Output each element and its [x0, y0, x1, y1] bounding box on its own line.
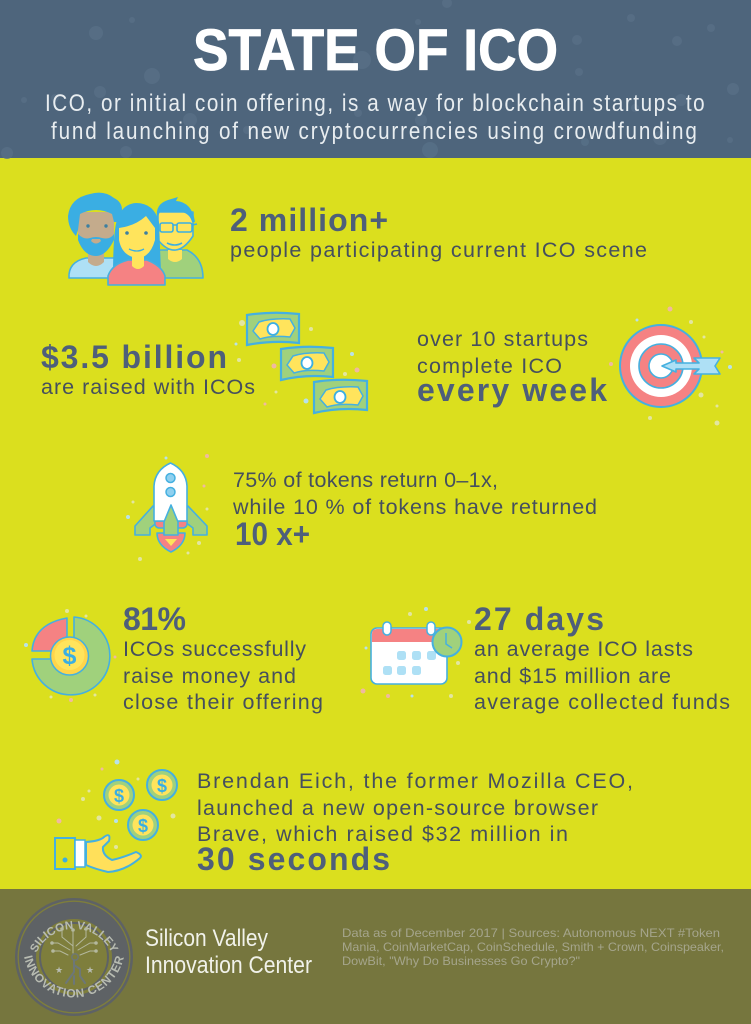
coin two: $ [157, 776, 167, 796]
stat: 30 seconds: 30 seconds [197, 841, 390, 877]
stat: 27 days: an average ICO lasts [474, 637, 693, 661]
stat: 30 seconds [197, 769, 633, 877]
stat: 10x+ [232, 468, 597, 552]
stat: $3.5 billion [41, 339, 255, 399]
man right [155, 197, 203, 278]
icon: hand with coins [55, 770, 177, 872]
organisation name [145, 925, 312, 979]
stat: every week: every week [417, 372, 607, 408]
decorative sparkle dots [24, 306, 732, 849]
tree canopy [53, 931, 95, 955]
subtitle: fund launching of new cryptocurrencies using crowdfunding [51, 118, 697, 144]
stat: 27 days: 27 days [474, 601, 604, 637]
icon: three people [68, 193, 203, 285]
stat: 27 days: and $15 million are [474, 664, 671, 688]
stars: ★ [86, 965, 94, 975]
panel: header [0, 0, 751, 159]
man left [68, 193, 122, 278]
icon: rocket [135, 463, 207, 552]
stat: 81%: close their offering [123, 690, 323, 714]
stat: 10x+: while 10 % of tokens have returned [232, 495, 597, 519]
icon: calendar with clock [371, 622, 462, 684]
stat: 10x+: 10 x+ [235, 516, 310, 552]
subtitle [45, 90, 705, 144]
icon: banknotes [247, 313, 367, 413]
stat: every week: over 10 startups [417, 327, 588, 351]
hand [55, 835, 141, 872]
stat: 81%: 81% [123, 601, 186, 637]
stat: 30 seconds: Brendan Eich, the former Mozilla CEO, [197, 769, 633, 793]
icon: donut chart with coin [32, 617, 110, 695]
sources note [342, 926, 724, 968]
logo: Silicon Valley Innovation Center seal: SILICON VALLEY [30, 920, 118, 952]
stat: 27 days: average collected funds [474, 690, 730, 714]
organisation name: Silicon Valley [145, 925, 268, 952]
sources note: Mania, CoinMarketCap, CoinSchedule, Smith + Crown, Coinspeaker, [342, 940, 724, 954]
organisation name: Innovation Center [145, 952, 312, 979]
stat: 10x+: 75% of tokens return 0–1x, [233, 468, 498, 492]
stars [55, 965, 94, 975]
stat: $3.5 billion: are raised with ICOs [41, 375, 255, 399]
panel: footer [0, 889, 751, 1024]
woman centre [108, 203, 165, 285]
logo: Silicon Valley Innovation Center seal: INNOVATION CENTER [24, 955, 124, 998]
icon: donut chart with coin: $ [63, 642, 77, 670]
stat: 81%: raise money and [123, 664, 296, 688]
icon: target with arrow [620, 325, 720, 407]
logo: Silicon Valley Innovation Center seal [15, 898, 133, 1016]
sources note: Data as of December 2017 | Sources: Autonomous NEXT #Token [342, 926, 720, 940]
coin three: $ [138, 816, 148, 836]
coin one: $ [114, 786, 124, 806]
stat: 30 seconds: Brave, which raised $32 million in [197, 822, 568, 846]
stat: 2 million+ [230, 202, 647, 262]
stat: 2 million+: 2 million+ [230, 202, 388, 238]
tree trunk [66, 954, 85, 984]
stat: 2 million+: people participating current ICO scene [230, 238, 647, 262]
stat: every week [417, 327, 607, 408]
stat: 81%: ICOs successfully [123, 637, 306, 661]
stars: ★ [55, 965, 63, 975]
sources note: DowBit, "Why Do Businesses Go Crypto?" [342, 954, 580, 968]
stat: every week: complete ICO [417, 354, 562, 378]
subtitle: ICO, or initial coin offering, is a way for blockchain startups to [45, 90, 705, 116]
stat: $3.5 billion: $3.5 billion [41, 339, 227, 375]
stat: 27 days [474, 601, 730, 714]
stat: 81% [123, 601, 323, 714]
stat: 30 seconds: launched a new open-source browser [197, 796, 598, 820]
title: STATE OF ICO [193, 18, 558, 83]
panel: body background [0, 158, 751, 889]
